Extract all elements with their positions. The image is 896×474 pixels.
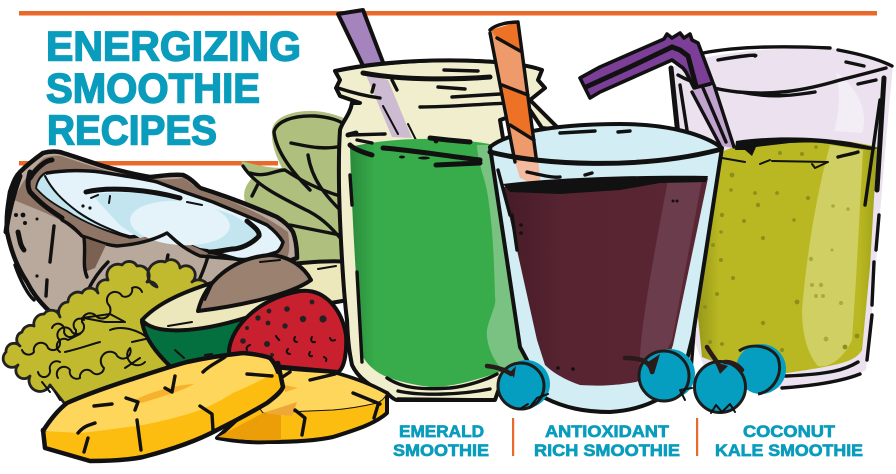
label divider 1 <box>512 418 514 456</box>
emerald smoothie jar <box>335 10 560 400</box>
jar linework <box>363 73 490 79</box>
kale smoothie liquid <box>698 139 877 373</box>
label divider 2 <box>696 418 698 456</box>
lettuce <box>3 260 210 404</box>
title: SMOOTHIE <box>46 64 260 112</box>
coconut kale smoothie glass <box>580 33 893 388</box>
jar body <box>335 60 560 400</box>
antioxidant liquid <box>503 177 708 386</box>
strawberry <box>229 291 346 372</box>
avocado pit <box>198 255 311 311</box>
label: emerald smoothie: EMERALD <box>399 422 484 441</box>
glass body <box>490 124 722 412</box>
coconut flesh <box>37 171 283 260</box>
label: antioxidant rich smoothie: RICH SMOOTHIE <box>534 441 680 460</box>
bendy purple straw <box>580 33 734 148</box>
glass body <box>670 48 893 388</box>
label: coconut kale smoothie: KALE SMOOTHIE <box>715 441 863 460</box>
orange striped straw <box>490 22 541 187</box>
avocado skin <box>142 318 245 368</box>
seeds on highlight <box>809 204 850 341</box>
liquid highlight <box>802 145 863 366</box>
antioxidant rich smoothie glass <box>490 22 722 412</box>
jar straw <box>338 10 389 78</box>
liquid highlight <box>477 145 530 368</box>
avocado half <box>142 255 348 368</box>
blueberry: coconut kale back <box>736 344 786 394</box>
front pineapple slice <box>43 353 283 461</box>
coconut rim <box>14 156 289 262</box>
blueberry: emerald <box>487 360 550 409</box>
title: RECIPES <box>47 106 217 154</box>
avocado flesh <box>142 261 348 330</box>
spinach leaves <box>242 111 348 265</box>
kale smoothie seeds <box>703 145 859 352</box>
glass rim linework <box>490 150 718 163</box>
label: coconut kale smoothie: COCONUT <box>743 422 836 441</box>
label: antioxidant rich smoothie: ANTIOXIDANT <box>545 422 670 441</box>
title <box>46 22 301 154</box>
title: ENERGIZING <box>46 22 301 70</box>
coconut cavity <box>93 192 260 250</box>
jar liquid <box>350 139 530 387</box>
blueberry: coconut kale front <box>694 347 746 413</box>
label: emerald smoothie: SMOOTHIE <box>393 441 489 460</box>
pineapple slices <box>43 353 387 461</box>
label: coconut kale smoothie <box>715 422 863 460</box>
straw inside jar <box>366 75 412 138</box>
back pineapple slice <box>217 368 387 442</box>
glass highlight <box>834 72 864 133</box>
coconut shell <box>7 152 297 312</box>
coconut <box>6 152 297 312</box>
coconut left edge tint <box>37 174 125 235</box>
liquid highlight <box>640 180 702 375</box>
blueberry: antioxidant <box>625 349 695 401</box>
label: antioxidant rich smoothie <box>534 422 680 460</box>
straw lower segment <box>693 85 734 148</box>
label: emerald smoothie <box>393 422 489 460</box>
